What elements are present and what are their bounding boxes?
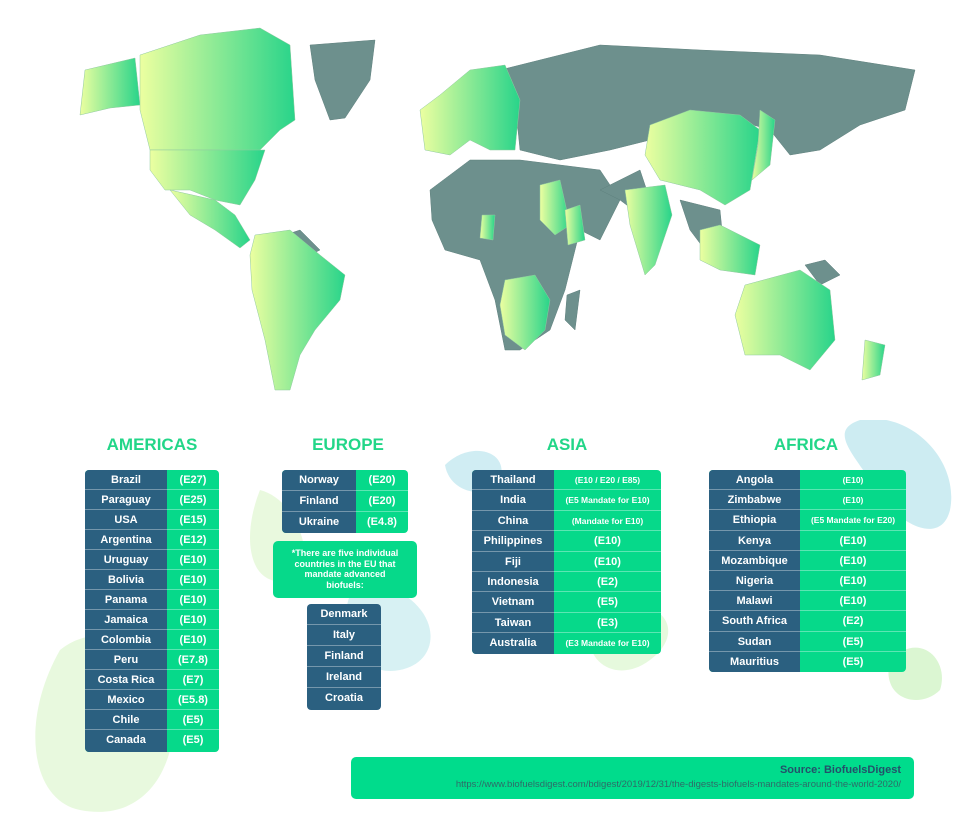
source box: https://www.biofuelsdigest.com/bdigest/2019/12/31/the-digests-biofuels-mandates-around-the-world-2020/ — [456, 779, 901, 790]
table: Asia: India — [500, 494, 526, 506]
table: Europe: Finland — [299, 495, 339, 507]
table: Americas: Peru — [114, 654, 138, 666]
table: Europe — [282, 470, 408, 533]
table: Americas: Canada — [106, 734, 146, 746]
table: Asia: Australia — [489, 637, 537, 649]
list: EU advanced biofuel countries: Croatia — [325, 692, 363, 704]
table: Americas: Jamaica — [104, 614, 148, 626]
table: Americas: (E27) — [180, 474, 206, 486]
table: Americas: (E10) — [180, 614, 206, 626]
table: Americas: (E25) — [180, 494, 206, 506]
table: Americas: (E7) — [183, 674, 203, 686]
table: Africa: (E5) — [843, 656, 863, 668]
table: Americas: (E7.8) — [178, 654, 208, 666]
table: Americas: Panama — [105, 594, 147, 606]
table: Americas: Argentina — [100, 534, 152, 546]
table: Americas: Bolivia — [108, 574, 144, 586]
table: Europe: (E4.8) — [367, 516, 397, 528]
table: Americas: (E10) — [180, 554, 206, 566]
source box: Source: BiofuelsDigest — [780, 764, 901, 776]
table: Africa: Sudan — [738, 636, 771, 648]
table: Africa: (E10) — [843, 475, 863, 485]
table: Americas: Uruguay — [104, 554, 148, 566]
list: EU advanced biofuel countries: Italy — [333, 629, 355, 641]
table: Asia: (E3 Mandate for E10) — [565, 638, 650, 648]
table: Americas: Chile — [113, 714, 139, 726]
table: Asia: (Mandate for E10) — [572, 516, 643, 526]
table: Africa: (E10) — [840, 575, 866, 587]
table: Americas: Brazil — [111, 474, 141, 486]
table: Europe: (E20) — [369, 474, 395, 486]
table: Americas: (E12) — [180, 534, 206, 546]
table: Asia — [472, 470, 661, 654]
table: Asia: (E10) — [594, 556, 621, 568]
table: Asia: (E5) — [597, 596, 618, 608]
callout: EU note — [273, 541, 417, 598]
table: Asia: China — [498, 515, 528, 527]
table: Americas: (E15) — [180, 514, 206, 526]
list: EU advanced biofuel countries: Finland — [324, 650, 364, 662]
table: Americas: Mexico — [107, 694, 145, 706]
table: Americas: (E10) — [180, 574, 206, 586]
world map — [80, 28, 916, 390]
table: Africa: Kenya — [738, 535, 771, 547]
table: Africa: Zimbabwe — [728, 494, 781, 506]
table: Americas: Colombia — [101, 634, 151, 646]
table: Africa: (E5) — [843, 636, 863, 648]
table: Africa — [709, 470, 906, 672]
heading: Africa: AFRICA — [774, 435, 838, 454]
table: Africa: Angola — [736, 474, 773, 486]
decorative blobs — [35, 420, 952, 812]
table: Asia: Philippines — [484, 535, 542, 547]
list: EU advanced biofuel countries: Denmark — [320, 608, 368, 620]
table: Asia: (E2) — [597, 576, 618, 588]
table: Americas: USA — [114, 514, 138, 526]
source box — [351, 757, 914, 799]
table: Europe: Ukraine — [299, 516, 339, 528]
table: Americas: (E5.8) — [178, 694, 208, 706]
table: Africa: Ethiopia — [733, 514, 776, 526]
table: Asia: (E10) — [594, 535, 621, 547]
table: Americas: (E5) — [183, 734, 203, 746]
heading: Europe: EUROPE — [312, 435, 384, 454]
table: Asia: Vietnam — [492, 596, 534, 608]
table: Africa: Nigeria — [736, 575, 773, 587]
table: Americas: Paraguay — [101, 494, 151, 506]
table: Americas: (E10) — [180, 594, 206, 606]
table: Africa: Mozambique — [721, 555, 788, 567]
table: Africa: Malawi — [736, 595, 773, 607]
table: Africa: (E2) — [843, 615, 863, 627]
table: Asia: (E5 Mandate for E10) — [565, 495, 650, 505]
table: Africa: (E10) — [840, 595, 866, 607]
table: Asia: (E10 / E20 / E85) — [575, 475, 640, 485]
table: Europe: (E20) — [369, 495, 395, 507]
heading: Asia: ASIA — [547, 435, 587, 454]
table: Asia: Thailand — [490, 474, 536, 486]
table: Americas — [85, 470, 219, 752]
table: Asia: Indonesia — [487, 576, 539, 588]
table: Africa: South Africa — [722, 615, 787, 627]
callout: EU note: *There are five individual countries in the EU that mandate advanced biofuels: — [292, 548, 398, 590]
table: Asia: (E3) — [597, 617, 618, 629]
table: Europe: Norway — [299, 474, 339, 486]
table: Americas: (E10) — [180, 634, 206, 646]
table: Asia: Taiwan — [495, 617, 531, 629]
table: Americas: (E5) — [183, 714, 203, 726]
list: EU advanced biofuel countries — [307, 604, 381, 710]
table: Africa: (E10) — [843, 495, 863, 505]
heading: Americas: AMERICAS — [107, 435, 197, 454]
list: EU advanced biofuel countries: Ireland — [326, 671, 362, 683]
table: Africa: (E10) — [840, 555, 866, 567]
table: Americas: Costa Rica — [98, 674, 154, 686]
table: Africa: (E5 Mandate for E20) — [811, 515, 895, 525]
table: Africa: Mauritius — [730, 656, 779, 668]
table: Africa: (E10) — [840, 535, 866, 547]
table: Asia: Fiji — [505, 556, 521, 568]
